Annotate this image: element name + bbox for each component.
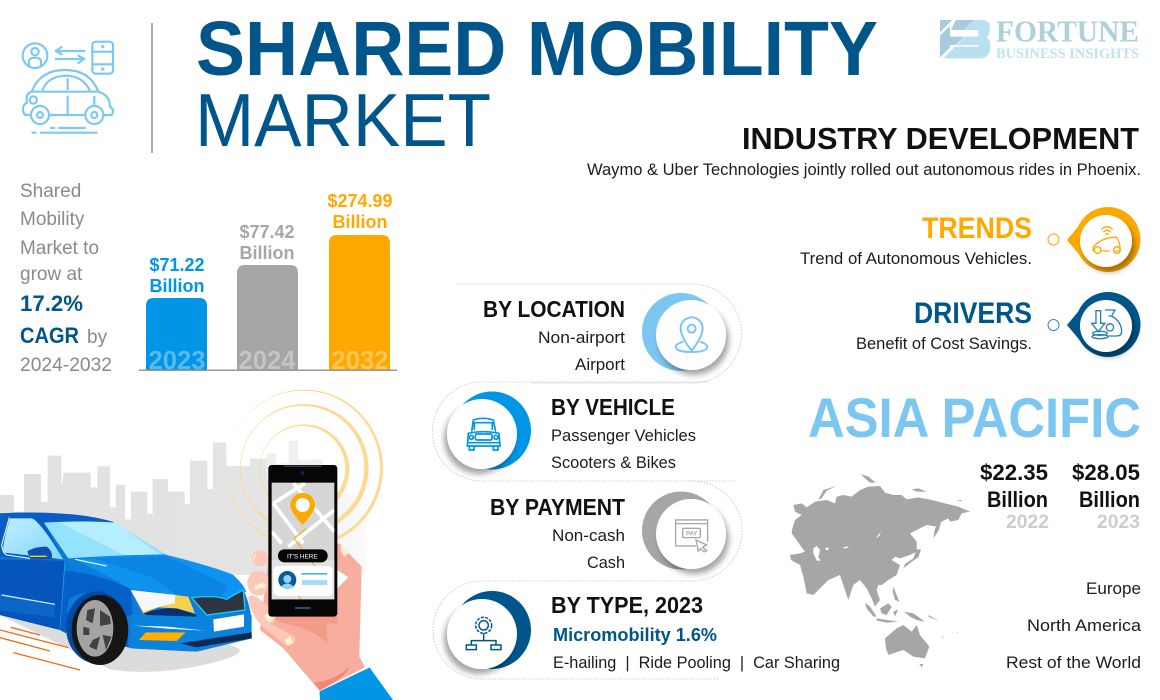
other regions list: Rest of the World [1006,653,1141,672]
bar 2032: 2032 [332,345,388,375]
panel: by location: Non-airport [538,328,625,347]
illustration: car and phone in hand [0,390,393,700]
map pin [290,493,315,525]
CAGR text block: Market to [20,238,99,259]
bar 2032: $274.99 [327,191,393,211]
icon: pay window: PAY [686,532,697,538]
other regions list: North America [1027,616,1142,635]
panel: by payment: Cash [587,553,625,572]
title: MARKET [195,78,491,162]
panel: drivers: DRIVERS [914,297,1032,330]
bar 2023: 2023 [148,345,206,375]
crescent badge [447,392,531,470]
icon: car front [467,418,500,450]
city skyline [0,441,367,593]
panel: by type: Micromobility 1.6% [553,625,717,645]
panel: by location: Airport [575,355,625,374]
panel: by vehicle: BY VEHICLE [551,394,675,420]
panel: drivers [856,292,1140,357]
ring badge [1067,292,1140,357]
CAGR text block: Shared [20,181,81,202]
car with shadow and speed lines [0,512,252,672]
title [195,6,878,162]
stat: 2023: Billion [1079,487,1140,512]
CAGR text block: grow at [20,264,83,285]
CAGR text block: 2024-2032 [20,355,112,376]
panel: trends [800,207,1140,272]
CAGR text block [20,181,112,376]
panel: by payment: Non-cash [552,526,625,545]
phone [268,465,337,617]
crescent badge [447,591,531,669]
icon: gear and org chart [466,617,501,650]
industry development [587,121,1141,179]
bar 2023: $71.22 [149,255,205,275]
panel: by vehicle: Scooters & Bikes [551,453,676,472]
logo: Fortune Business Insights: BUSINESS INSIGHTS [996,46,1139,62]
panel: by type [433,581,840,679]
panel: trends: TRENDS [922,212,1032,245]
icon: pay window [676,520,708,552]
crescent badge [642,293,726,371]
panel: drivers: Benefit of Cost Savings. [856,334,1032,353]
header divider [151,23,153,153]
CAGR text block: Mobility [20,209,85,230]
panel: by type: BY TYPE, 2023 [551,592,703,618]
icon: connected car [1093,227,1120,253]
icon: money bag and coins [1092,310,1122,339]
stat: 2022: 2022 [1006,512,1049,533]
CAGR text block: CAGR [20,323,79,348]
panel: trends: Trend of Autonomous Vehicles. [800,249,1032,268]
CAGR text block: 17.2% [20,291,83,316]
bar 2023 [146,255,207,375]
industry development: INDUSTRY DEVELOPMENT [742,121,1139,156]
panel: by payment: BY PAYMENT [490,494,625,520]
map: Asia Pacific [790,474,970,667]
bar 2024 [237,222,298,375]
crescent badge [642,492,726,570]
stat: 2023 [1072,460,1140,533]
panel: by vehicle [432,382,735,481]
icon: shared car with person and phone [23,42,113,133]
CAGR text block: by [87,327,108,348]
hand [247,543,365,691]
bar chart [139,191,397,375]
panel: by location: BY LOCATION [483,296,625,322]
other regions list [1006,579,1142,672]
bar 2032 [327,191,393,375]
sleeve [320,668,393,700]
icon: location pin [676,317,707,352]
industry development: Waymo & Uber Technologies jointly rolled out autonomous rides in Phoenix. [587,160,1141,179]
title: SHARED MOBILITY [196,6,878,92]
stat: 2022 [980,460,1049,533]
bar 2032: Billion [332,212,388,232]
panel: by location [457,284,742,383]
stat: 2022: $22.35 [980,460,1048,485]
panel: by type: E-hailing | Ride Pooling | Car Sharing [553,653,840,672]
other regions list: Europe [1086,579,1141,598]
logo: Fortune Business Insights: FORTUNE [996,14,1139,48]
panel: by payment [490,481,742,581]
bar 2024: 2024 [238,345,296,375]
bar 2023: Billion [150,276,204,296]
stat: 2022: Billion [987,487,1048,512]
bar 2024: Billion [240,243,294,263]
signal rings [226,390,383,547]
logo: Fortune Business Insights [940,14,1139,62]
phone: IT'S HERE [287,553,318,560]
panel: by vehicle: Passenger Vehicles [551,426,696,445]
ring badge [1067,207,1140,272]
bar 2024: $77.42 [239,222,295,242]
stat: 2023: $28.05 [1072,460,1140,485]
stat: 2023: 2023 [1097,512,1140,533]
